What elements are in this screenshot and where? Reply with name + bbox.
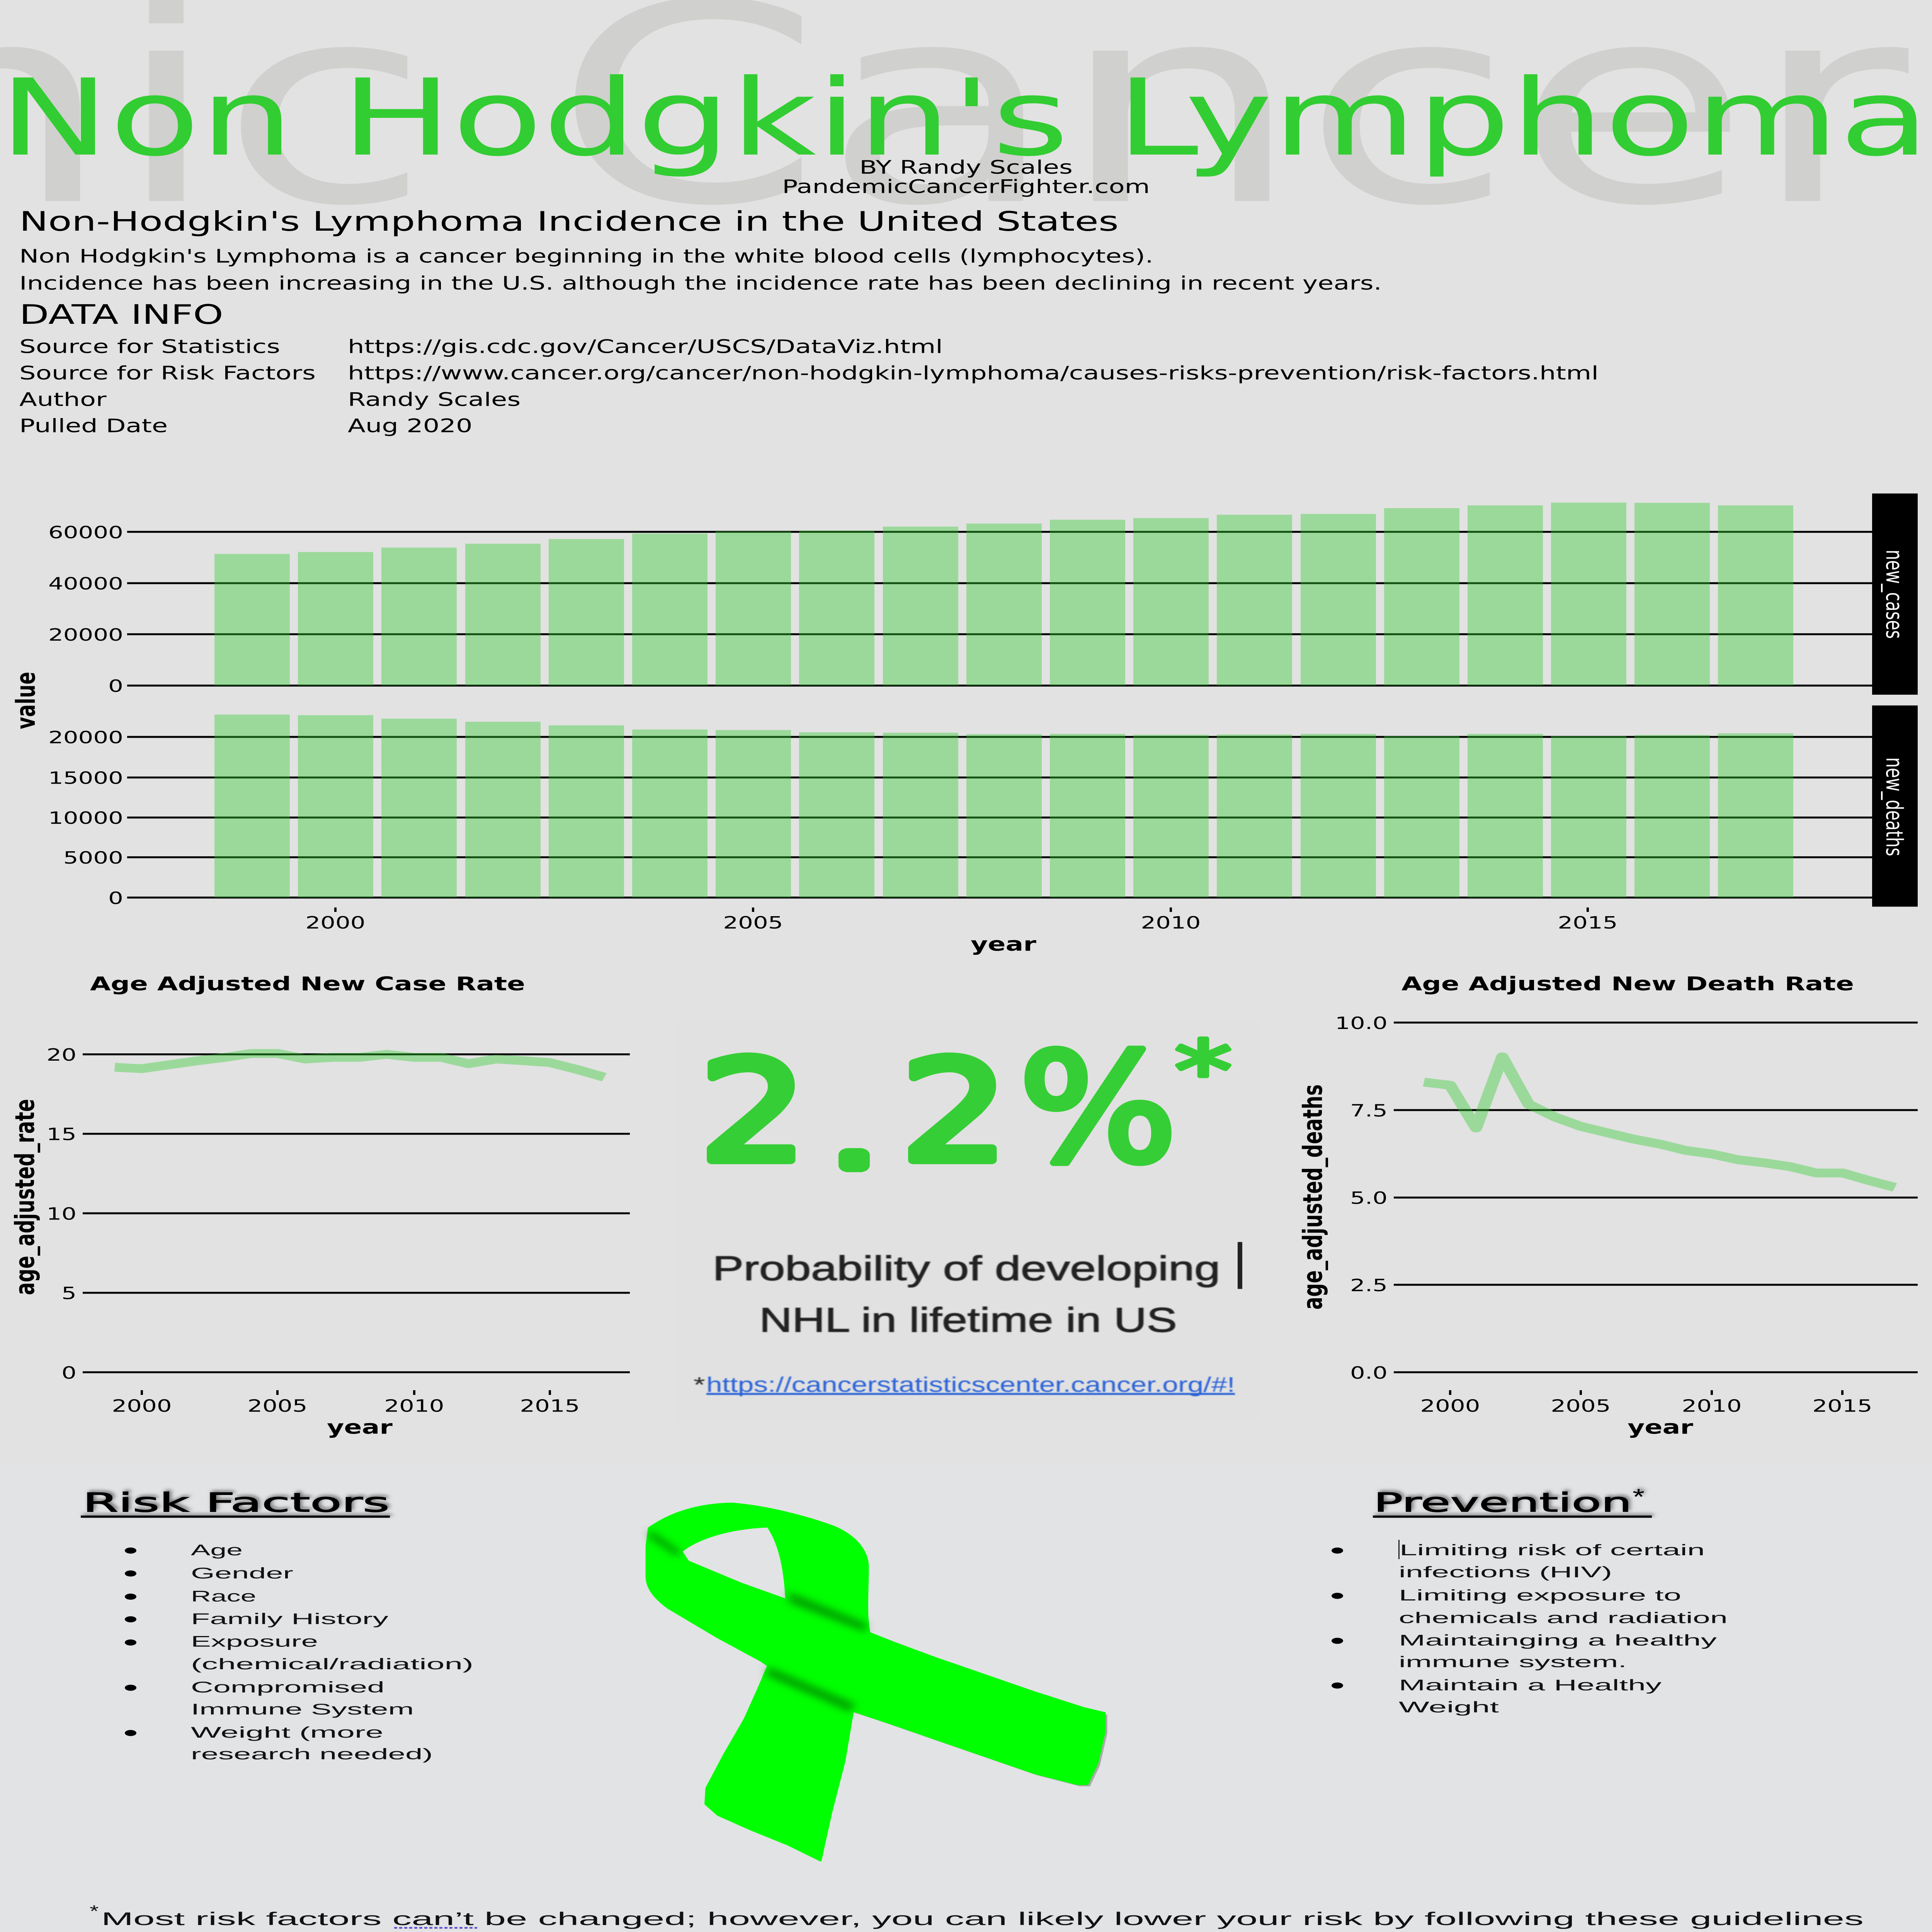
list text: Weight (1399, 1699, 1499, 1716)
y axis labels: 15 (46, 1125, 77, 1144)
panel: new deaths (48, 706, 1918, 908)
x axis: 2005 (1551, 1396, 1611, 1416)
list text: Maintainging a healthy (1399, 1632, 1717, 1649)
probability text: NHL in lifetime in US (759, 1301, 1177, 1339)
intro text (19, 245, 1382, 294)
heading: Prevention (1374, 1488, 1632, 1518)
heading: * (1633, 1484, 1645, 1509)
panel: risk factors (81, 1488, 473, 1763)
x axis (1420, 1390, 1872, 1438)
list text: Limiting risk of certain (1400, 1542, 1705, 1559)
big number: . (836, 1089, 872, 1185)
list text: Age (191, 1542, 243, 1559)
intro text: Non Hodgkin's Lymphoma is a cancer beginning in the white blood cells (lymphocytes). (19, 245, 1153, 267)
data info table: Author (19, 389, 107, 410)
list text (1399, 1542, 1728, 1716)
data info table: Pulled Date (19, 415, 168, 437)
new deaths y axis labels (48, 728, 123, 908)
strip: new_deaths: new_deaths (1881, 757, 1907, 856)
byline: BY Randy Scales (859, 156, 1073, 178)
case rate line (115, 1053, 604, 1077)
icon: green awareness ribbon (646, 1503, 1107, 1861)
big number (699, 1021, 1232, 1196)
new deaths y axis labels: 15000 (48, 769, 123, 788)
x axis: 2005 (247, 1396, 308, 1416)
bullets (1332, 1548, 1343, 1689)
footnote (90, 1902, 1864, 1929)
new cases y axis labels: 60000 (48, 523, 123, 543)
new deaths y axis labels: 5000 (63, 849, 123, 868)
text cursor (1238, 1242, 1242, 1289)
heading: incidence: Non-Hodgkin's Lymphoma Incidence in the United States (19, 206, 1119, 237)
list text: Race (191, 1588, 256, 1605)
list text (191, 1542, 473, 1763)
death rate line (1424, 1057, 1895, 1187)
panel: new cases (48, 493, 1918, 696)
probability text: Probability of developing (713, 1249, 1220, 1288)
new cases bars (214, 503, 1793, 685)
list text: Weight (more (191, 1724, 383, 1741)
byline: PandemicCancerFighter.com (782, 176, 1150, 197)
y axis labels: 5 (61, 1284, 77, 1303)
list text: Immune System (191, 1701, 414, 1718)
shared x axis: 2005 (723, 913, 783, 933)
y axis labels: 0.0 (1350, 1363, 1388, 1383)
new cases y axis labels (48, 523, 123, 696)
y axis title: value: value (10, 672, 41, 729)
x axis: 2010 (1682, 1396, 1742, 1416)
new cases y axis labels: 20000 (48, 625, 123, 645)
y axis title: age_adjusted_rate (10, 1099, 41, 1295)
x axis: 2015 (520, 1396, 580, 1416)
data info table: Randy Scales (348, 389, 520, 410)
shared x axis: 2010 (1141, 913, 1201, 933)
footnote: * (90, 1902, 99, 1921)
y axis labels: 0 (61, 1363, 77, 1383)
shared x axis: 2015 (1558, 913, 1618, 933)
list text: research needed) (191, 1746, 433, 1763)
list text: immune system. (1399, 1653, 1627, 1670)
text cursor (1398, 1540, 1400, 1559)
bullets (125, 1548, 136, 1736)
y axis labels: 10.0 (1335, 1014, 1388, 1033)
chart title: Age Adjusted New Case Rate (90, 973, 525, 995)
callout: 2.2% probability (694, 1021, 1242, 1396)
list text: chemicals and radiation (1399, 1609, 1728, 1627)
new cases y axis labels: 0 (108, 677, 123, 696)
new deaths y axis labels: 10000 (48, 809, 123, 828)
y axis labels: 2.5 (1350, 1276, 1388, 1295)
new deaths bars (214, 714, 1793, 898)
list text: infections (HIV) (1399, 1564, 1612, 1581)
data info table: Source for Risk Factors (19, 362, 316, 384)
big number: * (1174, 1023, 1232, 1119)
data info table: https://gis.cdc.gov/Cancer/USCS/DataViz.html (348, 336, 943, 357)
panel: prevention (1332, 1484, 1728, 1716)
x axis: 2000 (1420, 1396, 1480, 1416)
list text: Maintain a Healthy (1399, 1677, 1662, 1694)
strip: new_cases (1872, 493, 1918, 695)
y axis labels: 7.5 (1350, 1101, 1388, 1121)
chart title: Age Adjusted New Death Rate (1401, 973, 1854, 995)
shared x axis: year (971, 934, 1036, 955)
list text: Compromised (191, 1679, 384, 1696)
line chart: age adjusted new case rate (10, 973, 630, 1438)
new cases y axis labels: 40000 (48, 574, 123, 594)
data info table: Source for Statistics (19, 336, 280, 357)
shared x axis (305, 908, 1618, 955)
big number: 2 (699, 1031, 808, 1193)
data info table: https://www.cancer.org/cancer/non-hodgkin-lymphoma/causes-risks-prevention/risk-factors.html (348, 362, 1599, 384)
title: Non Hodgkin's Lymphoma (0, 57, 1930, 180)
x axis: 2010 (384, 1396, 444, 1416)
faceted bar chart (10, 493, 1918, 955)
strip: new_deaths (1872, 706, 1918, 906)
heading (1373, 1484, 1652, 1518)
list text: Family History (191, 1611, 389, 1628)
ribbon fold shadows (649, 1529, 866, 1713)
source link: https://cancerstatisticscenter.cancer.org/#! (706, 1373, 1235, 1396)
y axis labels: 20 (46, 1046, 77, 1065)
source link: * (694, 1373, 705, 1396)
intro text: Incidence has been increasing in the U.S. although the incidence rate has been declining in recent years. (19, 272, 1382, 294)
list text: Exposure (191, 1633, 318, 1650)
new deaths y axis labels: 20000 (48, 728, 123, 747)
y axis labels: 5.0 (1350, 1189, 1388, 1208)
big number: % (1019, 1021, 1177, 1196)
list text: Gender (191, 1565, 293, 1582)
y axis labels (46, 1046, 77, 1383)
strip: new_cases: new_cases (1881, 549, 1907, 639)
heading: Risk Factors (83, 1488, 389, 1518)
data info table: Aug 2020 (348, 415, 473, 437)
x axis: year (327, 1417, 393, 1438)
y axis title: age_adjusted_deaths (1298, 1084, 1328, 1310)
probability text (713, 1249, 1220, 1339)
footnote: Most risk factors can’t be changed; however, you can likely lower your risk by following these guidelines (101, 1909, 1864, 1929)
byline (782, 156, 1150, 197)
x axis: 2000 (112, 1396, 172, 1416)
shared x axis: 2000 (305, 913, 366, 933)
x axis: year (1628, 1417, 1693, 1438)
y axis labels (1335, 1014, 1388, 1383)
data info table (19, 336, 1599, 437)
big number: 2 (901, 1031, 1009, 1193)
x axis: 2015 (1812, 1396, 1872, 1416)
list text: Limiting exposure to (1399, 1587, 1681, 1604)
new deaths y axis labels: 0 (108, 889, 123, 908)
line chart: age adjusted new death rate (1298, 973, 1918, 1438)
y axis labels: 10 (46, 1204, 77, 1224)
heading: data info: DATA INFO (19, 299, 223, 330)
x axis (112, 1390, 580, 1438)
list text: (chemical/radiation) (191, 1656, 473, 1673)
